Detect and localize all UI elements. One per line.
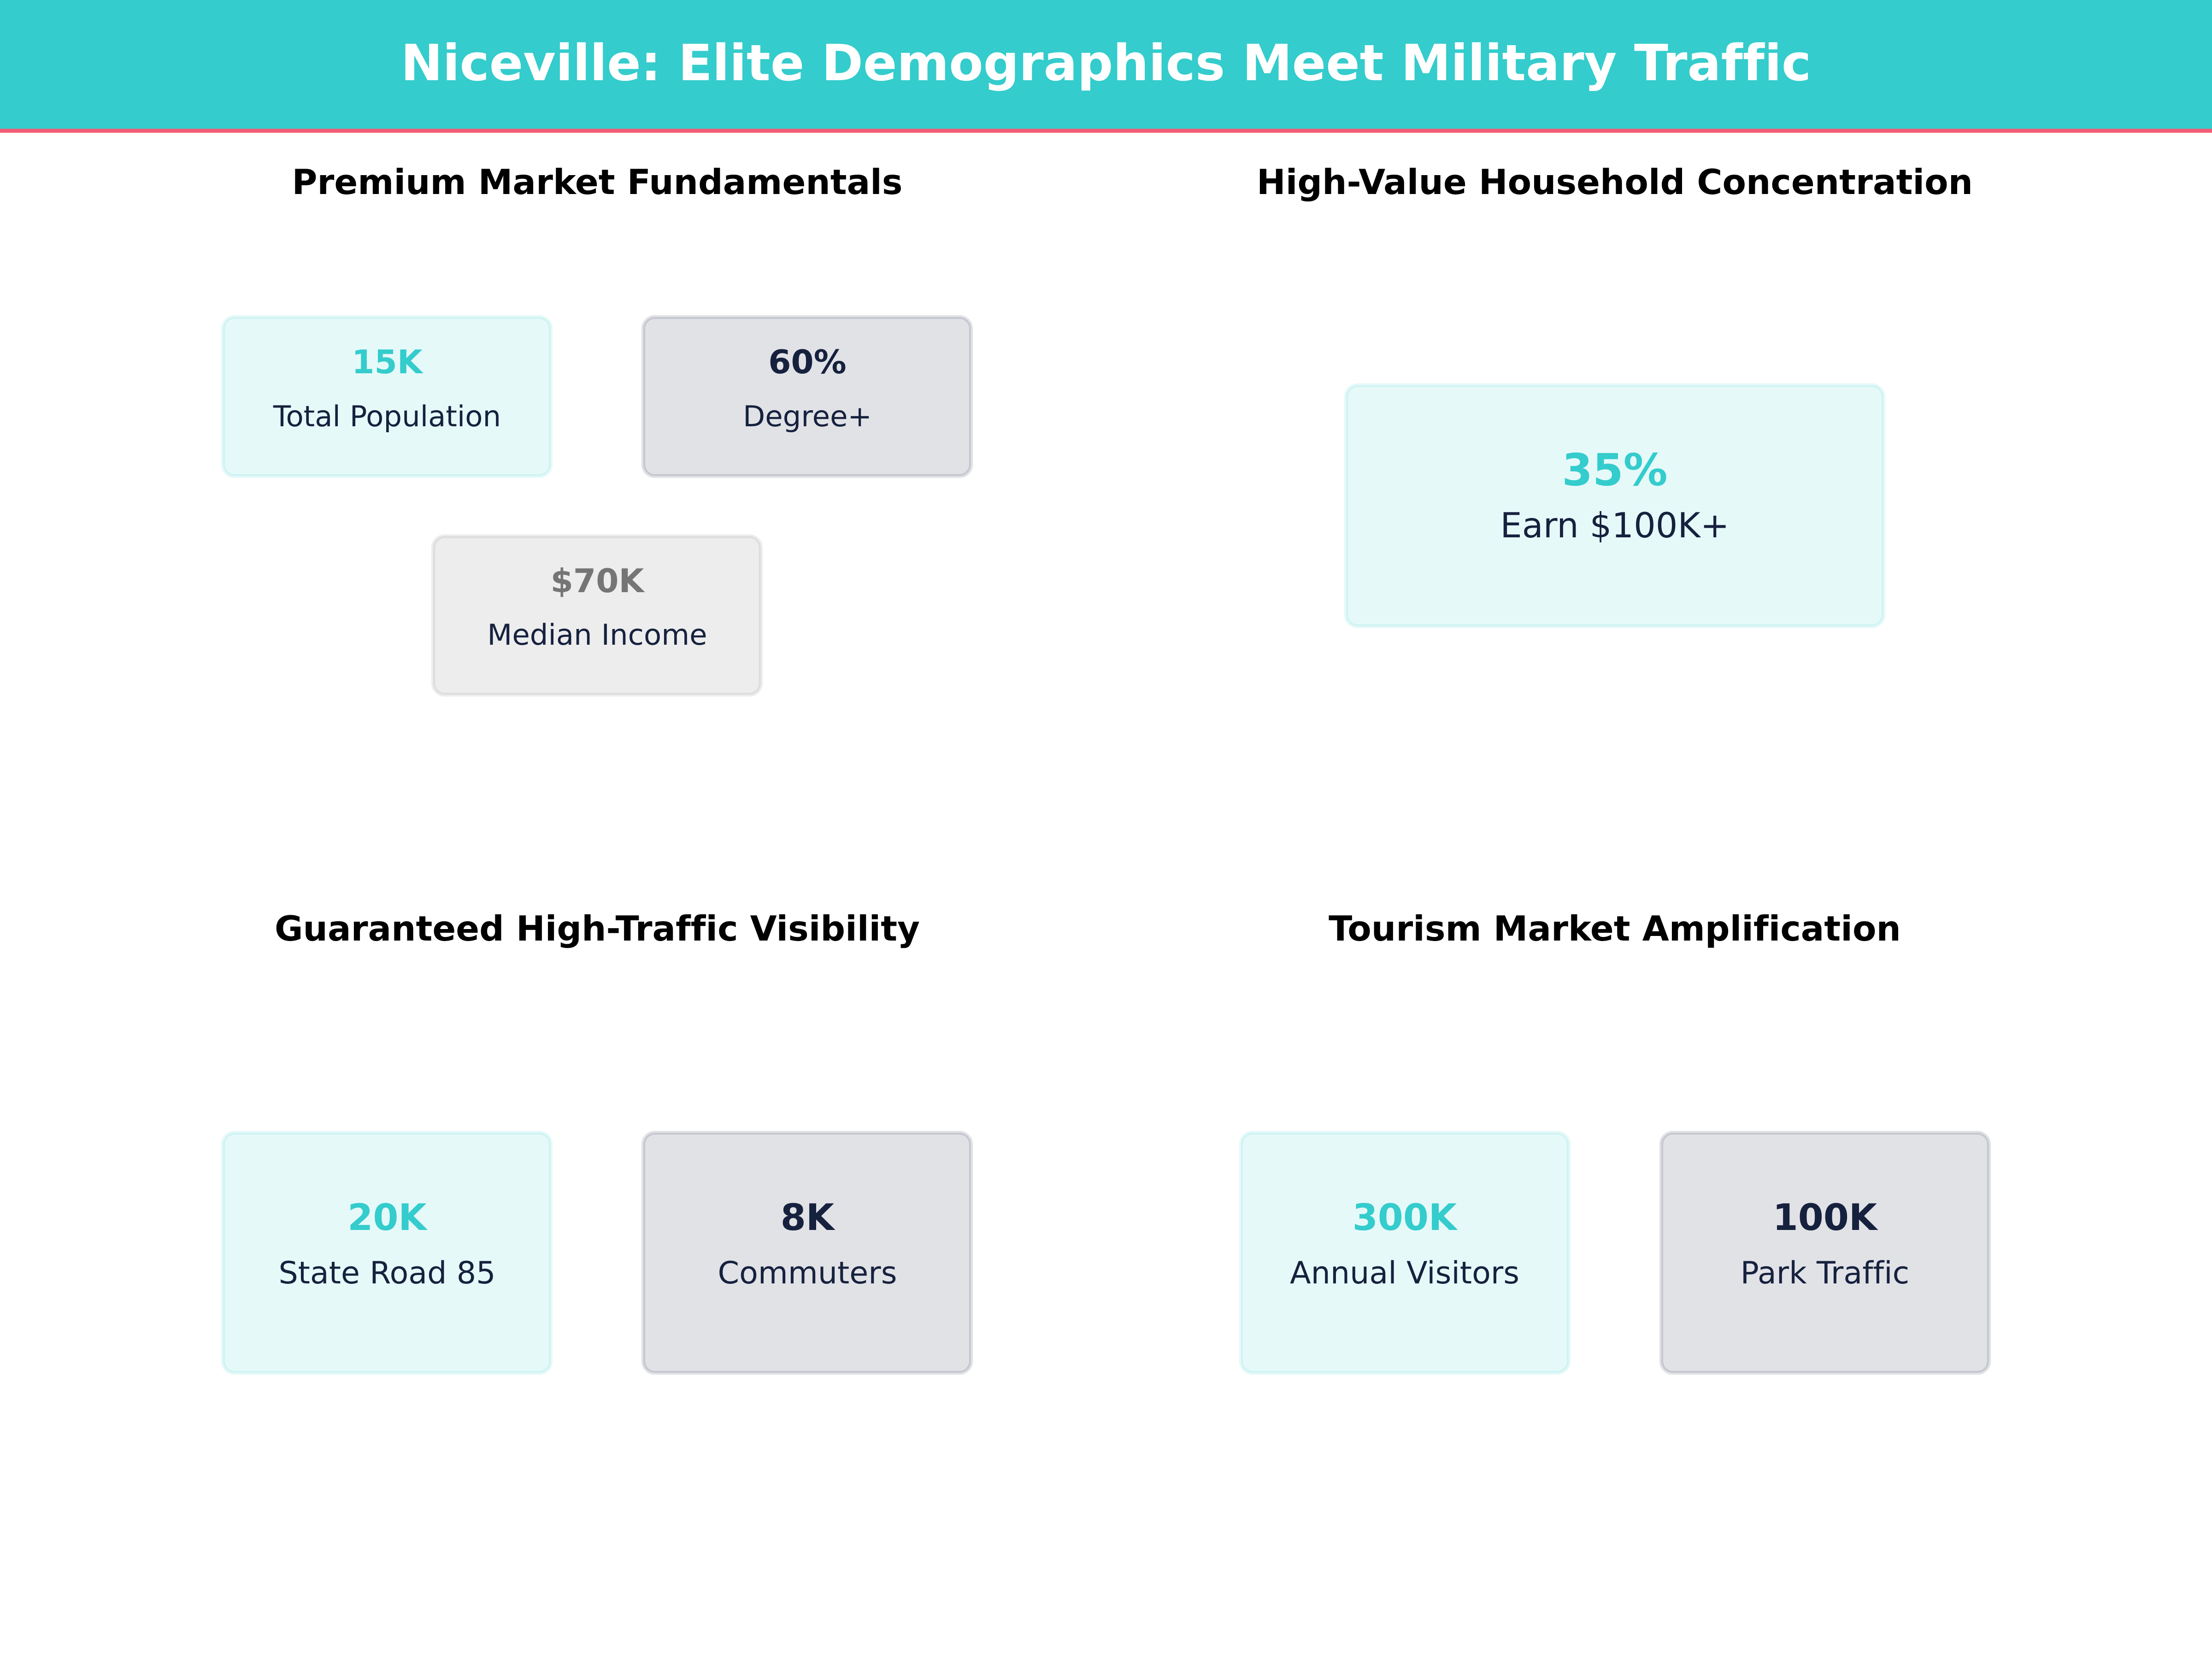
card: median income: Median Income [487, 618, 707, 652]
panel: high-value household concentration [1257, 162, 1973, 626]
card: park traffic [1661, 1133, 1989, 1373]
card: park traffic: Park Traffic [1741, 1255, 1909, 1291]
card: earn 100K+ [1346, 385, 1883, 626]
card: total population [223, 317, 551, 476]
heading: high-value household concentration: High-Value Household Concentration [1257, 162, 1973, 202]
card: park traffic: 100K [1773, 1196, 1878, 1239]
heading: premium market fundamentals: Premium Market Fundamentals [292, 162, 903, 202]
card: annual visitors: Annual Visitors [1290, 1255, 1519, 1291]
card: degree: Degree+ [743, 400, 872, 433]
panel: guaranteed high-traffic visibility [223, 908, 971, 1373]
panel: tourism market amplification [1241, 908, 1989, 1373]
card: total population: 15K [352, 343, 424, 381]
card: state road 85: 20K [347, 1196, 428, 1239]
heading: tourism market amplification: Tourism Market Amplification [1329, 908, 1901, 949]
card: earn 100K+: Earn $100K+ [1500, 505, 1730, 546]
card: annual visitors: 300K [1353, 1196, 1458, 1239]
card: median income [433, 536, 761, 695]
card: degree [643, 317, 971, 476]
heading: guaranteed high-traffic visibility: Guaranteed High-Traffic Visibility [275, 908, 920, 949]
card: commuters [643, 1133, 971, 1373]
panel: premium market fundamentals [223, 162, 971, 695]
title banner [0, 0, 2212, 133]
title banner: Niceville: Elite Demographics Meet Military Traffic [401, 34, 1811, 92]
card: total population: Total Population [273, 400, 501, 433]
card: annual visitors [1241, 1133, 1569, 1373]
card: degree: 60% [768, 343, 847, 381]
card: earn 100K+: 35% [1562, 444, 1668, 496]
card: commuters: Commuters [718, 1255, 897, 1291]
card: median income: $70K [551, 562, 645, 600]
card: commuters: 8K [781, 1196, 835, 1239]
card: state road 85 [223, 1133, 551, 1373]
card: state road 85: State Road 85 [278, 1255, 496, 1291]
